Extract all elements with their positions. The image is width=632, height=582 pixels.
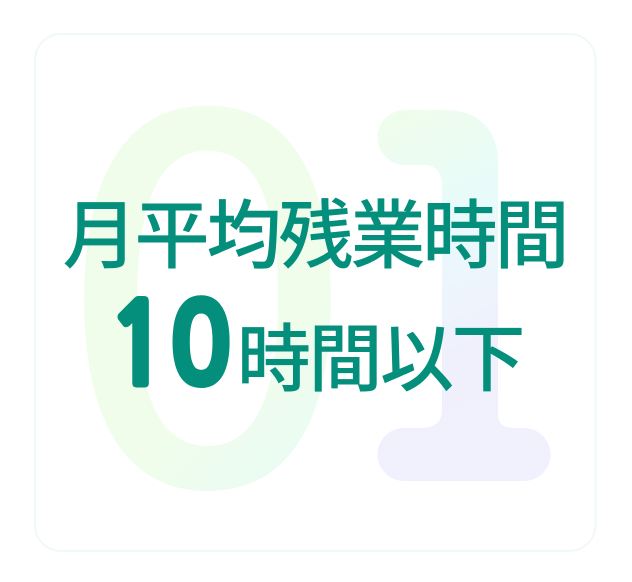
value: 10 hours or less [107,290,523,401]
watermark number 01 [84,106,550,491]
watermark digit 1: 1 [354,11,576,582]
unit text: 時間以下 [237,318,523,401]
watermark digit 1 [378,110,550,481]
panel: card [35,34,596,551]
number 10: 10 [107,290,232,401]
infographic [34,33,596,552]
heading: monthly average overtime: 月平均残業時間 [62,194,567,278]
